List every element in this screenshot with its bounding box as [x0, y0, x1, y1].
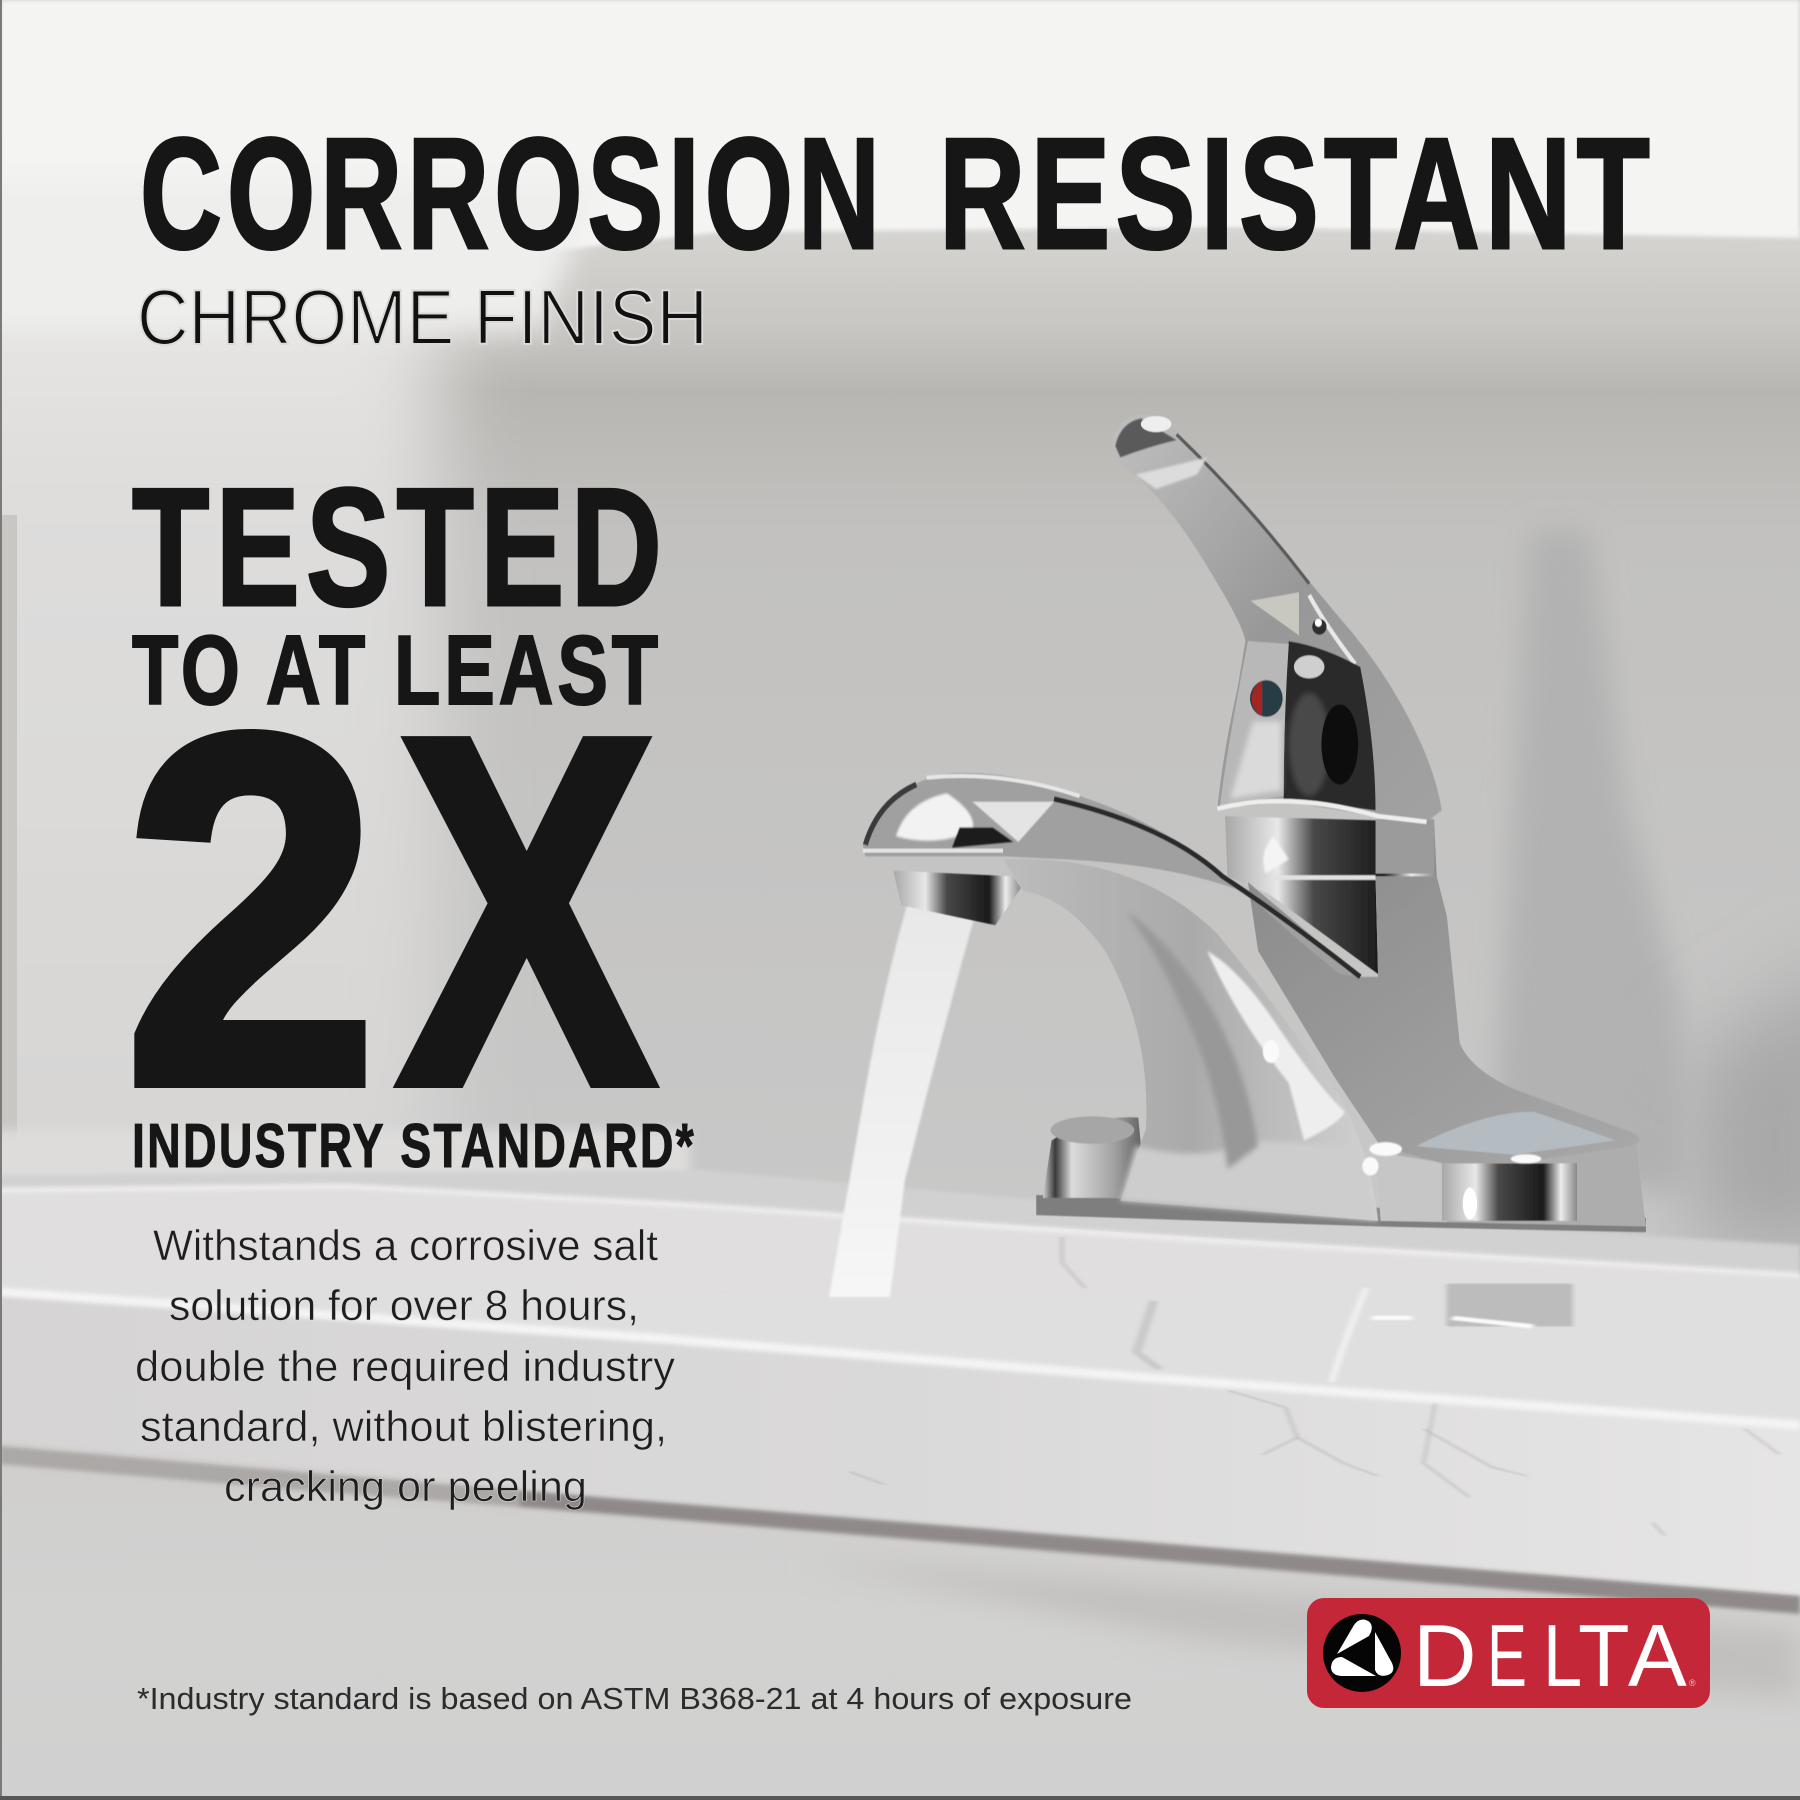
upper white soffit: [0, 0, 1800, 290]
wall: [0, 230, 1800, 1230]
wordmark: E: [1487, 1606, 1527, 1705]
shadow fade on left: [0, 1440, 520, 1515]
front face of counter: [0, 1292, 1800, 1596]
base highlights: [1263, 1040, 1541, 1175]
wordmark: [1413, 1606, 1687, 1705]
body text: double the required industry: [135, 1343, 675, 1391]
wall shadow right: [1490, 530, 1680, 1190]
left pale wall: [0, 180, 440, 1220]
spout top: [863, 773, 1360, 977]
lever highlight: [1251, 592, 1299, 635]
wordmark: L: [1543, 1606, 1582, 1705]
subtitle: CHROME FINISH: [137, 273, 708, 361]
faucet: [863, 414, 1646, 1232]
hot cold indicator: [1250, 680, 1283, 717]
wordmark: A: [1628, 1606, 1687, 1705]
right wall dark corner: [1690, 950, 1800, 1260]
2X: X: [398, 635, 657, 1187]
spout head highlight: [863, 785, 1054, 851]
2X: [124, 633, 657, 1188]
Delta logo: [1307, 1598, 1710, 1708]
left puck: [1043, 1116, 1146, 1198]
tested: TESTED: [132, 453, 668, 641]
handle chrome left: [1220, 641, 1289, 806]
spout dark edge: [1054, 799, 1360, 977]
body text: solution for over 8 hours,: [169, 1282, 639, 1330]
2X: 2: [124, 633, 378, 1188]
lever edge highlight: [1177, 434, 1309, 584]
rim highlight: [0, 1186, 1800, 1275]
shade below counter: [800, 1560, 1800, 1700]
left side strip: [0, 515, 17, 1180]
dark shadow under counter: [0, 1446, 1800, 1614]
lever tip: [1115, 416, 1207, 489]
marble veins: [850, 1237, 1779, 1536]
faucet reflection: [1332, 1284, 1573, 1382]
main body: [1248, 876, 1640, 1163]
right puck: [1442, 1163, 1577, 1221]
claim heading: [124, 453, 696, 1188]
sink interior: [0, 1271, 1800, 1440]
sweep lower area: [1120, 1140, 1378, 1221]
water stream: [829, 905, 975, 1297]
soffit fade left: [0, 180, 600, 330]
counter rim: [0, 1186, 1800, 1292]
neck: [1225, 816, 1437, 974]
body text: Withstands a corrosive salt: [153, 1222, 658, 1270]
floor: [0, 1440, 1800, 1800]
registered mark: ®: [1689, 1678, 1696, 1688]
title: CORROSION: [140, 106, 885, 282]
handle dark body: [1284, 641, 1376, 810]
industry standard: INDUSTRY STANDARD*: [132, 1112, 696, 1181]
counter back surface: [0, 1170, 1800, 1290]
body text: standard, without blistering,: [140, 1403, 667, 1451]
title: [140, 106, 1655, 282]
deck plate: [1036, 1195, 1646, 1232]
spout highlight: [1207, 951, 1345, 1140]
neck band: [1376, 819, 1434, 874]
handle mottling: [1289, 693, 1330, 796]
baseboard: [0, 1130, 690, 1190]
lever bottom edge: [1217, 801, 1427, 822]
blue reflection on body: [1416, 1112, 1615, 1155]
neck highlights: [1263, 836, 1289, 874]
front edge highlight: [0, 1292, 1800, 1425]
footnote: *Industry standard is based on ASTM B368-21 at 4 hours of exposure: [137, 1681, 1132, 1716]
spout front: [1003, 859, 1378, 1221]
spout light edge: [927, 776, 1080, 796]
body text: [135, 1222, 675, 1511]
handle hole: [1321, 704, 1358, 785]
centre block: [1376, 1152, 1447, 1222]
right cover: [1381, 1140, 1646, 1227]
wordmark: T: [1578, 1607, 1630, 1705]
borders: [0, 0, 2, 1800]
lever: [1112, 414, 1442, 822]
to at least: TO AT LEAST: [132, 615, 662, 725]
aerator: [893, 871, 1021, 925]
logo mark: [1323, 1614, 1401, 1692]
handle chrome light: [1230, 721, 1281, 799]
body text: cracking or peeling: [224, 1463, 587, 1511]
handle highlight: [1294, 655, 1324, 678]
wordmark: D: [1413, 1606, 1477, 1705]
